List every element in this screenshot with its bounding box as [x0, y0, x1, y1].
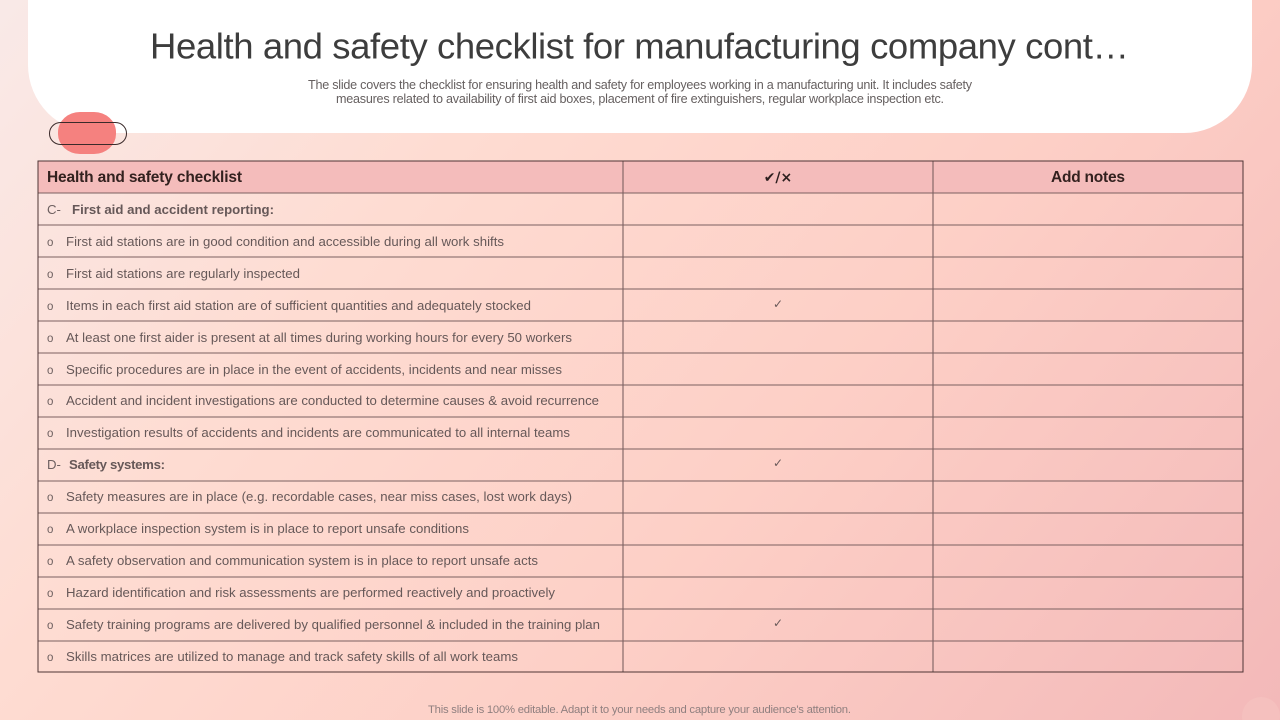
title: Health and safety checklist for manufacturing company cont… [150, 26, 1129, 66]
row 12: Safety training programs are delivered by qualified personnel & included in the training plan [66, 617, 600, 632]
decorative pill icon [50, 112, 126, 154]
row 13: Skills matrices are utilized to manage and track safety skills of all work teams [66, 649, 518, 664]
row 2: o [47, 269, 53, 281]
section D heading: D- [47, 457, 61, 472]
header: add notes: Add notes [1051, 169, 1125, 186]
decorative corner circle [1242, 697, 1280, 720]
row 7: Investigation results of accidents and incidents are communicated to all internal teams [66, 425, 570, 440]
row 10: o [47, 556, 53, 568]
title panel [28, 0, 1252, 133]
row 4: At least one first aider is present at all times during working hours for every 50 workers [66, 330, 572, 345]
footer note: This slide is 100% editable. Adapt it to your needs and capture your audience's attention. [428, 704, 851, 716]
row 13: o [47, 652, 53, 664]
row 3: o [47, 301, 53, 313]
subtitle: The slide covers the checklist for ensuring health and safety for employees working in a manufacturing unit. It includes safety [308, 78, 973, 92]
row 10: A safety observation and communication system is in place to report unsafe acts [66, 553, 538, 568]
table header row background [38, 161, 1243, 193]
row 1: First aid stations are in good condition and accessible during all work shifts [66, 234, 504, 249]
row 5: o [47, 365, 53, 377]
checklist table [38, 161, 1243, 672]
section D heading: Safety systems: [69, 457, 165, 472]
row 4: o [47, 333, 53, 345]
row 11: Hazard identification and risk assessments are performed reactively and proactively [66, 585, 555, 600]
section C heading: First aid and accident reporting: [72, 202, 274, 217]
row 6: o [47, 396, 53, 408]
row 1: o [47, 237, 53, 249]
row 8: Safety measures are in place (e.g. recordable cases, near miss cases, lost work days) [66, 489, 572, 504]
header: checklist: Health and safety checklist [47, 169, 242, 186]
row 2: First aid stations are regularly inspected [66, 266, 300, 281]
row 3: Items in each first aid station are of sufficient quantities and adequately stocked [66, 298, 531, 313]
subtitle: measures related to availability of first aid boxes, placement of fire extinguishers, regular workplace inspection etc. [336, 92, 944, 106]
subtitle [308, 78, 973, 106]
row 3 check mark: ✓ [773, 297, 783, 311]
row 8: o [47, 492, 53, 504]
row 12 check mark: ✓ [773, 616, 783, 630]
section C heading: C- [47, 202, 61, 217]
row 7: o [47, 428, 53, 440]
row 12: o [47, 620, 53, 632]
row 9: o [47, 524, 53, 536]
row 6: Accident and incident investigations are conducted to determine causes & avoid recurrence [66, 393, 599, 408]
row 9: A workplace inspection system is in place to report unsafe conditions [66, 521, 469, 536]
section D check mark: ✓ [773, 456, 783, 470]
header: check or cross: ✔/× [764, 170, 792, 186]
row 5: Specific procedures are in place in the event of accidents, incidents and near misses [66, 362, 562, 377]
row 11: o [47, 588, 53, 600]
